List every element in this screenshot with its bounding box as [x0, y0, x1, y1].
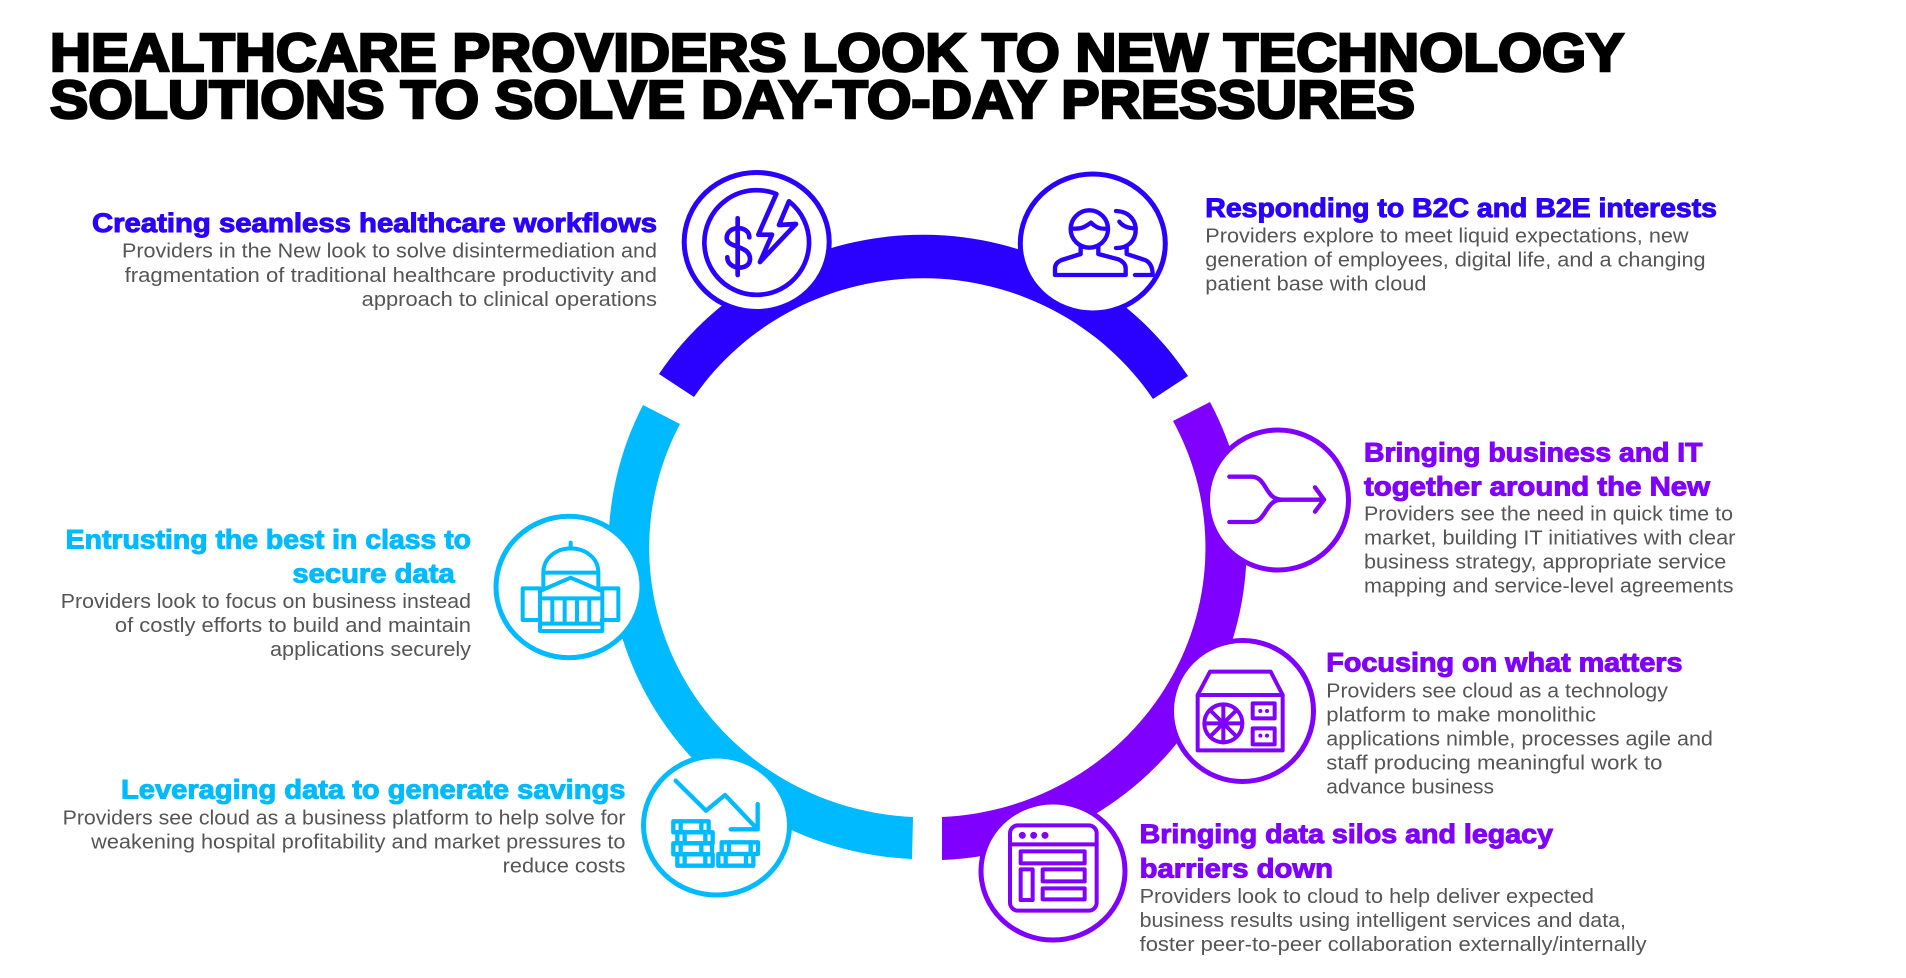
- icon: browser window: [981, 802, 1125, 940]
- body text: [1205, 226, 1706, 296]
- icon: merging arrow: [1208, 430, 1348, 570]
- panel: leveraging data to generate savings: [63, 756, 790, 895]
- ring segment: purple: [942, 402, 1247, 860]
- heading: secure data: [292, 558, 456, 588]
- heading: Focusing on what matters: [1326, 647, 1682, 677]
- heading: Creating seamless healthcare workflows: [92, 208, 657, 238]
- body text: [1140, 886, 1647, 956]
- body text: [61, 591, 471, 661]
- heading: together around the New: [1364, 472, 1711, 502]
- panel: focusing on what matters: [1172, 640, 1713, 798]
- title: [50, 23, 1624, 130]
- heading: Responding to B2C and B2E interests: [1205, 193, 1717, 223]
- body text: Providers explore to meet liquid expectations, new: [1205, 226, 1689, 248]
- heading: Bringing business and IT: [1364, 438, 1703, 468]
- body text: Providers see cloud as a technology: [1326, 680, 1668, 702]
- icon: dollar and lightning: [684, 172, 829, 312]
- panel: entrusting the best in class to secure data: [61, 516, 642, 661]
- body text: of costly efforts to build and maintain: [115, 615, 471, 637]
- body text: platform to make monolithic: [1326, 704, 1596, 726]
- heading: [1364, 438, 1711, 502]
- body text: market, building IT initiatives with clear: [1364, 528, 1736, 550]
- body text: mapping and service-level agreements: [1364, 576, 1734, 598]
- icon: capitol building: [496, 516, 642, 658]
- body text: approach to clinical operations: [362, 289, 657, 311]
- ring segment: blue: [659, 235, 1188, 399]
- body text: [63, 807, 626, 877]
- title: SOLUTIONS TO SOLVE DAY-TO-DAY PRESSURES: [50, 70, 1415, 130]
- body text: applications nimble, processes agile and: [1326, 728, 1713, 750]
- body text: advance business: [1326, 776, 1494, 798]
- body text: applications securely: [270, 639, 471, 661]
- panel: creating seamless healthcare workflows: [92, 172, 829, 312]
- heading: barriers down: [1140, 853, 1333, 883]
- body text: weakening hospital profitability and market pressures to: [90, 831, 625, 853]
- heading: [66, 524, 471, 588]
- body text: business strategy, appropriate service: [1364, 552, 1726, 574]
- body text: [1364, 504, 1736, 598]
- heading: [1140, 819, 1553, 883]
- heading: Entrusting the best in class to: [66, 524, 471, 554]
- icon: two people: [1020, 174, 1165, 313]
- title: HEALTHCARE PROVIDERS LOOK TO NEW TECHNOLOGY: [50, 23, 1624, 83]
- body text: fragmentation of traditional healthcare productivity and: [125, 265, 657, 287]
- body text: patient base with cloud: [1205, 274, 1426, 296]
- panel: bringing data silos and legacy barriers down: [981, 802, 1647, 956]
- body text: Providers see the need in quick time to: [1364, 504, 1733, 526]
- body text: [1326, 680, 1713, 798]
- body text: business results using intelligent services and data,: [1140, 910, 1626, 932]
- body text: [122, 241, 657, 311]
- body text: generation of employees, digital life, and a changing: [1205, 250, 1706, 272]
- icon: server unit: [1172, 640, 1314, 782]
- panel: bringing business and IT together: [1208, 430, 1736, 598]
- heading: Bringing data silos and legacy: [1140, 819, 1553, 849]
- body text: Providers see cloud as a business platform to help solve for: [63, 807, 626, 829]
- body text: Providers look to cloud to help deliver expected: [1140, 886, 1594, 908]
- body text: foster peer-to-peer collaboration externally/internally: [1140, 934, 1647, 956]
- ring segment: cyan: [608, 405, 913, 859]
- body text: staff producing meaningful work to: [1326, 752, 1662, 774]
- body text: Providers in the New look to solve disintermediation and: [122, 241, 657, 263]
- panel: responding to B2C and B2E interests: [1020, 174, 1717, 313]
- body text: Providers look to focus on business instead: [61, 591, 471, 613]
- heading: Leveraging data to generate savings: [121, 774, 626, 804]
- icon: falling chart and coins: [644, 756, 790, 895]
- body text: reduce costs: [503, 855, 626, 877]
